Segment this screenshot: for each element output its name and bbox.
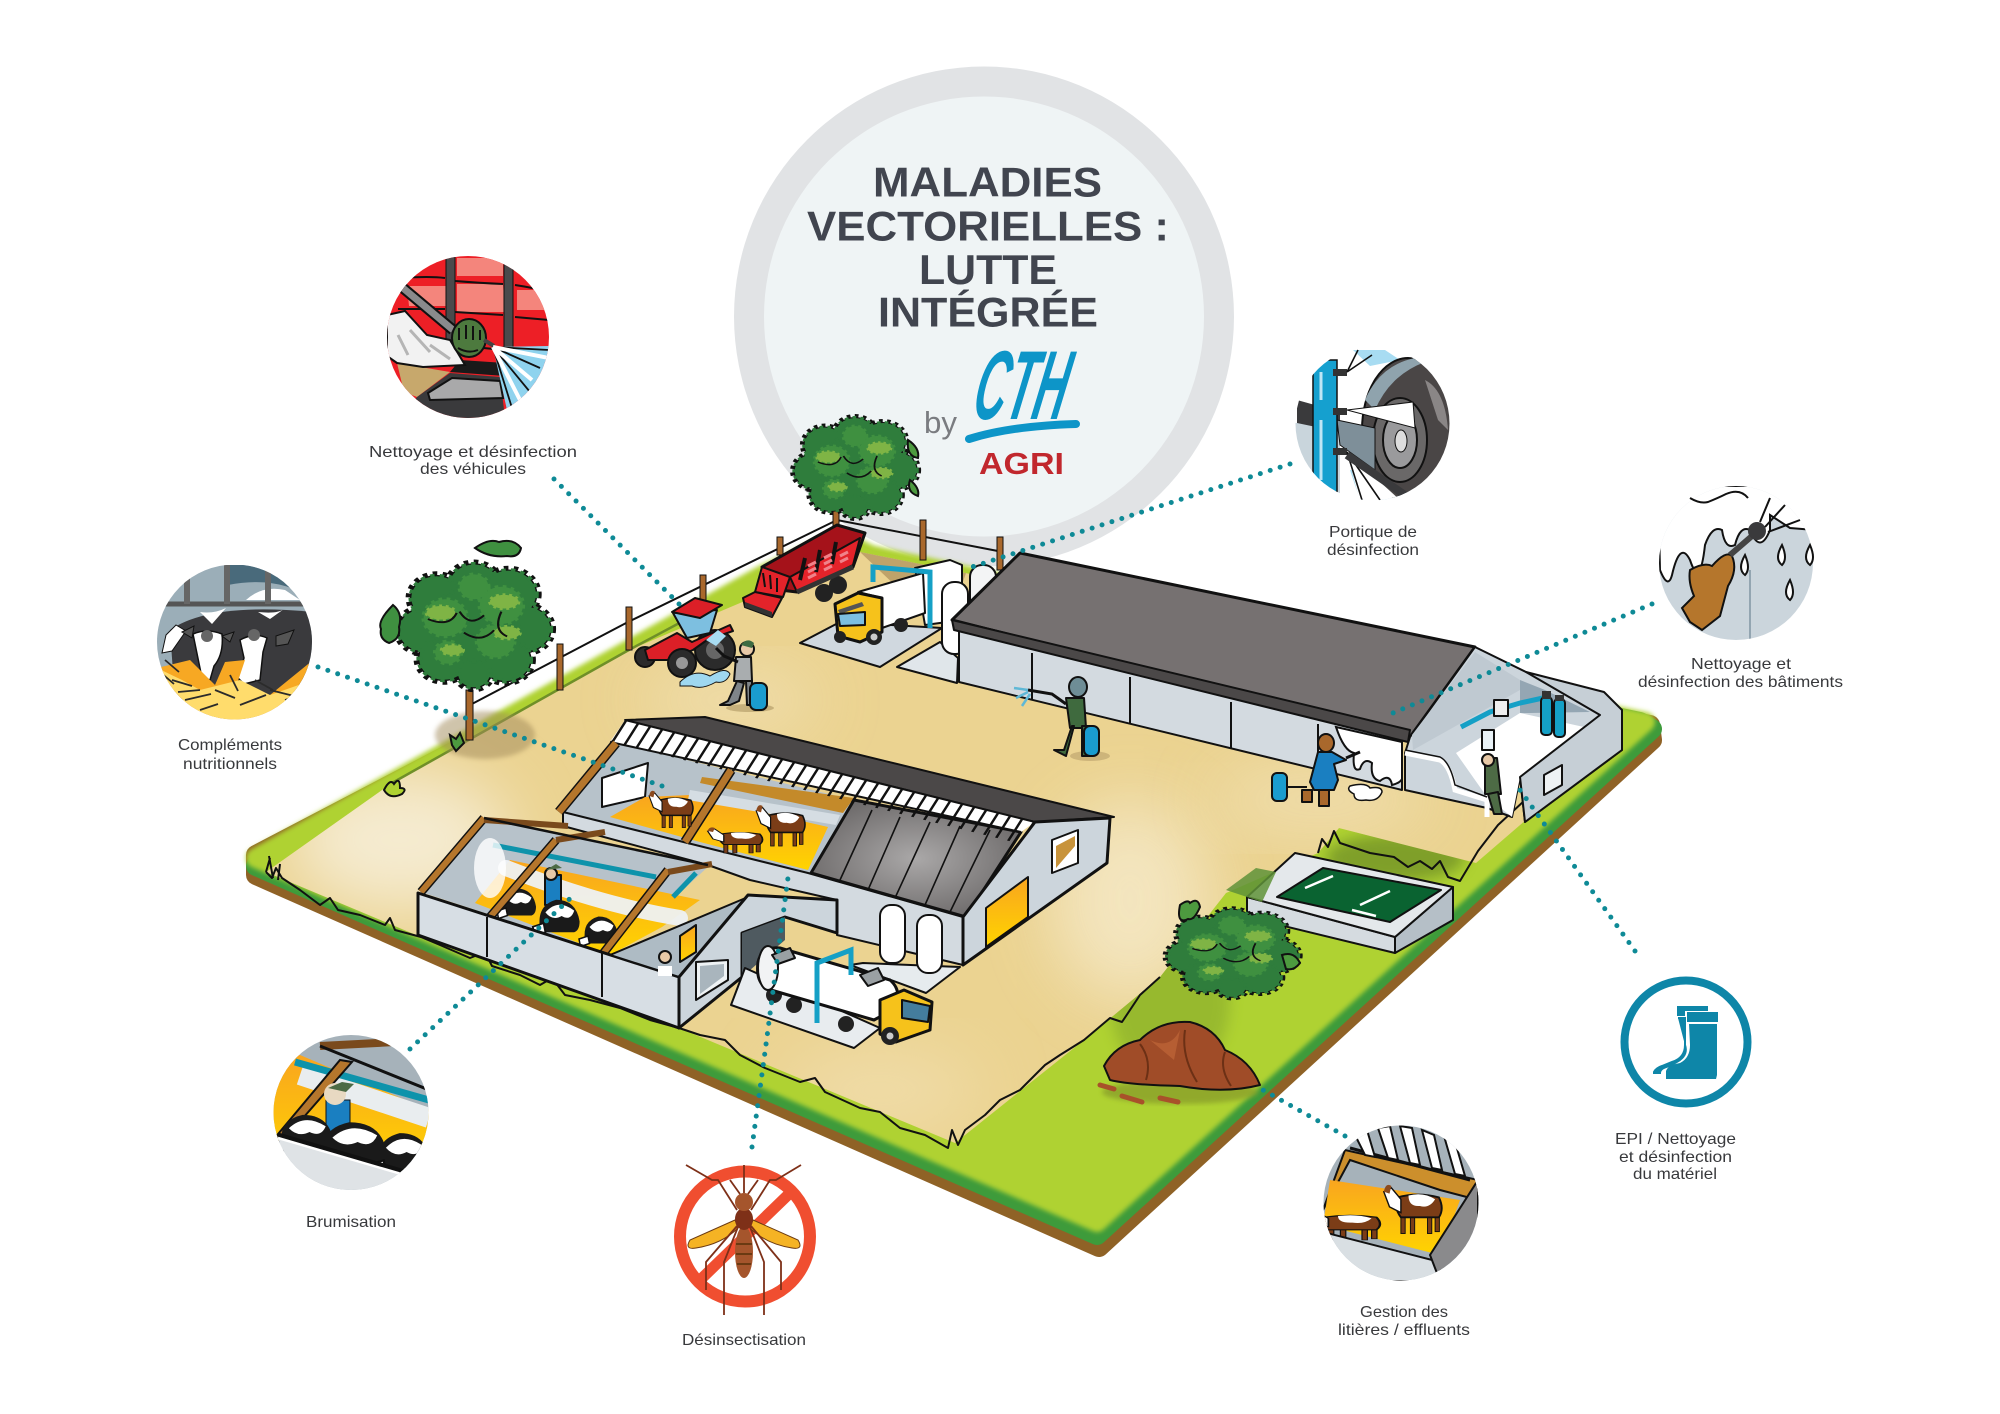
label: nutritional supplements <box>178 737 282 773</box>
label: litter and effluents: Gestion des <box>1360 1304 1448 1321</box>
label: misting: Brumisation <box>306 1214 396 1231</box>
farm platform base <box>256 540 1652 1247</box>
label: disinfection gantry: désinfection <box>1327 542 1419 559</box>
label: vehicle cleaning: des véhicules <box>420 461 526 478</box>
label: nutritional supplements: nutritionnels <box>183 756 277 773</box>
worker with sprayer by tractor <box>716 640 774 712</box>
title: VECTORIELLES : <box>807 202 1169 250</box>
main barn <box>559 717 1114 993</box>
title <box>807 158 1169 336</box>
tree back <box>794 417 918 528</box>
title: MALADIES <box>873 158 1102 206</box>
tree left <box>380 541 552 759</box>
vignette: nutritional supplements <box>157 565 313 721</box>
connector: misting <box>410 893 576 1049</box>
tractor <box>635 598 735 687</box>
fence <box>470 520 1003 705</box>
manure heap <box>1100 1022 1260 1104</box>
label: vehicle cleaning <box>369 444 577 478</box>
logo: by CTH Agri: CTH <box>965 331 1082 441</box>
vignette: litter and effluents <box>1324 1126 1478 1280</box>
label: PPE: du matériel <box>1633 1166 1717 1183</box>
label: building cleaning: Nettoyage et <box>1691 656 1792 673</box>
label: building cleaning <box>1638 656 1843 691</box>
label: PPE: et désinfection <box>1619 1149 1732 1166</box>
plant on grass edge <box>384 781 405 796</box>
label: insect control: Désinsectisation <box>682 1332 806 1349</box>
label: disinfection gantry: Portique de <box>1329 524 1417 541</box>
worker in green spraying <box>1014 677 1110 761</box>
label: litter and effluents <box>1338 1304 1470 1339</box>
concrete slabs and milk truck at the back <box>800 560 996 683</box>
vignette: misting <box>273 1035 430 1191</box>
logo: by CTH Agri: by <box>924 405 957 440</box>
label: litter and effluents: litières / effluents <box>1338 1322 1470 1339</box>
vignette: building cleaning <box>1658 486 1814 642</box>
logo: by CTH Agri <box>924 331 1082 481</box>
label: vehicle cleaning: Nettoyage et désinfection <box>369 444 577 461</box>
label: nutritional supplements: Compléments <box>178 737 282 754</box>
connector: insect control <box>752 870 789 1147</box>
icon: mosquito crossed out <box>680 1165 810 1315</box>
label: PPE: EPI / Nettoyage <box>1615 1131 1736 1148</box>
vignette: disinfection gantry <box>1295 347 1454 503</box>
covered effluent pit <box>1247 853 1453 953</box>
vignette: vehicle cleaning <box>387 256 549 418</box>
worker in blue spraying <box>1272 734 1382 806</box>
connector: nutrition <box>318 667 662 786</box>
connector: gantry <box>972 464 1290 567</box>
label: building cleaning: désinfection des bâtiments <box>1638 674 1843 691</box>
connector: litter <box>1263 1090 1345 1136</box>
front building with open pen <box>418 818 837 1028</box>
shrub <box>1166 868 1300 998</box>
annex building <box>1405 647 1622 822</box>
title: LUTTE <box>919 246 1057 293</box>
tanker truck <box>731 946 932 1048</box>
logo: by CTH Agri: AGRI <box>979 446 1064 481</box>
dirt yard <box>266 552 1527 1148</box>
title medallion <box>734 66 1234 566</box>
connector: PPE <box>1515 783 1635 951</box>
label: disinfection gantry <box>1327 524 1419 559</box>
connector: vehicles <box>554 479 680 605</box>
title: INTÉGRÉE <box>878 288 1098 336</box>
icon: rubber boots <box>1624 980 1748 1104</box>
red trailer <box>743 525 865 617</box>
back barn <box>952 553 1475 790</box>
connector: buildings <box>1393 604 1652 713</box>
label: PPE <box>1615 1131 1736 1183</box>
foam on wall <box>1336 727 1402 785</box>
